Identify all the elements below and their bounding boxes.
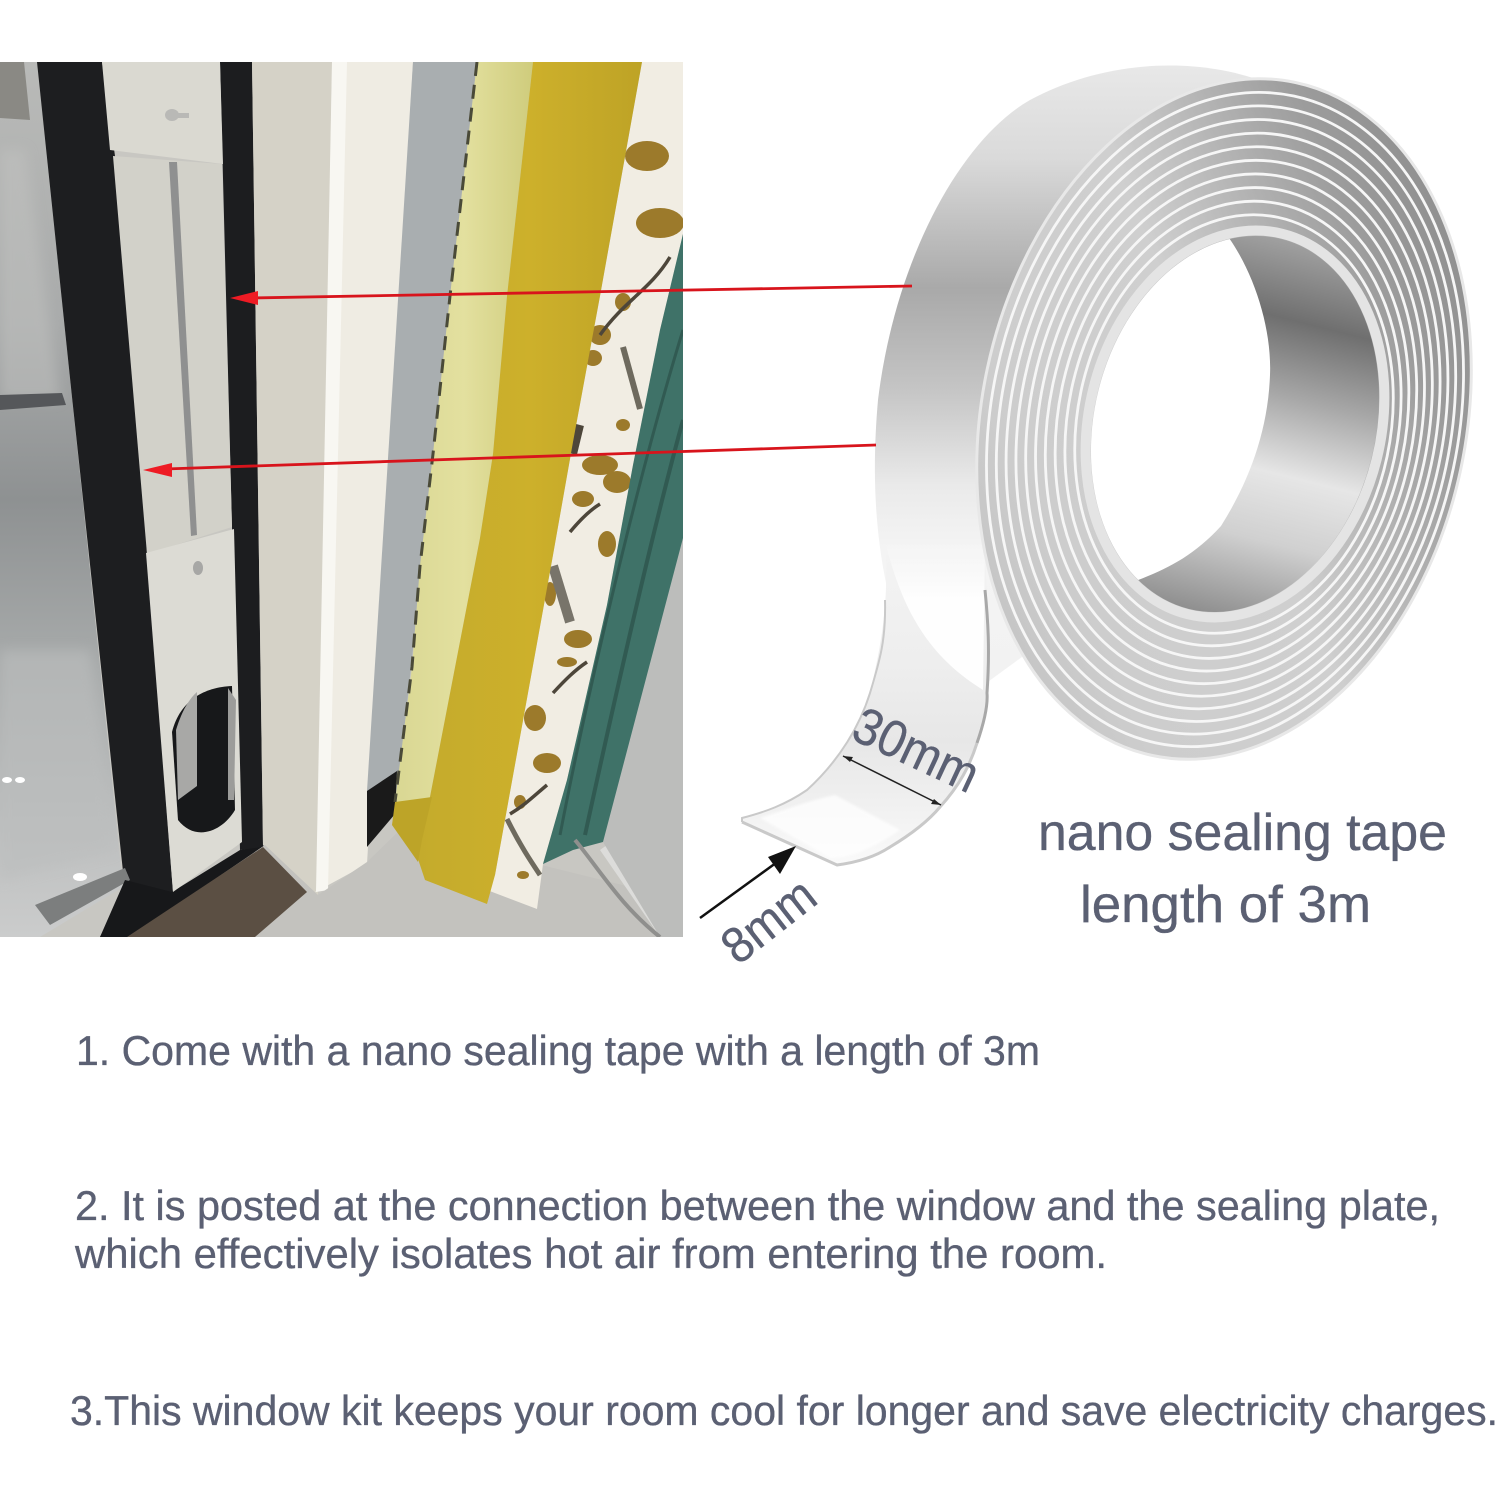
lower wing screw <box>193 561 203 575</box>
tail highlight <box>886 545 985 690</box>
dimension arrow: 8mm thickness <box>700 846 796 918</box>
feature 2 text <box>74 1182 1440 1277</box>
dark window frame <box>37 62 173 937</box>
dimension label: 30mm: 30mm <box>844 696 988 805</box>
floor <box>218 845 368 895</box>
glass reflections <box>2 777 87 881</box>
feature 3 text: 3.This window kit keeps your room cool for longer and save electricity charges. <box>70 1387 1498 1434</box>
transparent tape tail <box>742 555 988 865</box>
floral branches <box>507 257 670 875</box>
lower plate of window kit with hose opening <box>146 529 242 892</box>
green curtain <box>543 234 683 864</box>
red arrow: upper <box>230 286 912 305</box>
wall behind curtains <box>603 530 683 937</box>
pale curtain lining <box>395 62 533 859</box>
tape roll <box>742 32 1498 865</box>
hose opening <box>172 686 235 832</box>
yellow curtain hem <box>392 797 432 862</box>
floral curtain <box>487 62 683 909</box>
beige wall <box>252 62 332 895</box>
product label: nano sealing tape <box>1038 804 1447 862</box>
photo: window kit installed on sliding door beside curtains <box>0 62 684 937</box>
floor strip on right <box>575 840 660 937</box>
dimension arrow: 30mm width <box>843 756 941 805</box>
tail tip highlight <box>760 795 900 858</box>
tape outer band <box>875 66 1300 684</box>
grey wall <box>367 62 477 814</box>
product label: length of 3m <box>1080 876 1371 934</box>
tape core see-through opening <box>1091 239 1270 580</box>
glass door pane <box>0 62 123 937</box>
feature 2 text: 2. It is posted at the connection between the window and the sealing plate, <box>75 1182 1440 1229</box>
red arrow: lower <box>143 445 876 477</box>
tape front face with wound layers <box>916 32 1498 806</box>
white door trim <box>310 62 413 895</box>
tail edges <box>742 590 988 865</box>
product label <box>1038 804 1447 934</box>
upper wing screw <box>165 109 189 121</box>
yellow curtain <box>418 62 642 904</box>
floral blossoms <box>514 141 684 879</box>
dimension label: 8mm: 8mm <box>710 867 827 975</box>
tape core inner wall <box>1052 205 1418 643</box>
upper plate of window kit <box>113 156 232 554</box>
feature 2 text: which effectively isolates hot air from entering the room. <box>74 1230 1107 1277</box>
right black frame <box>220 62 263 850</box>
feature 1 text: 1. Come with a nano sealing tape with a length of 3m <box>76 1027 1040 1074</box>
